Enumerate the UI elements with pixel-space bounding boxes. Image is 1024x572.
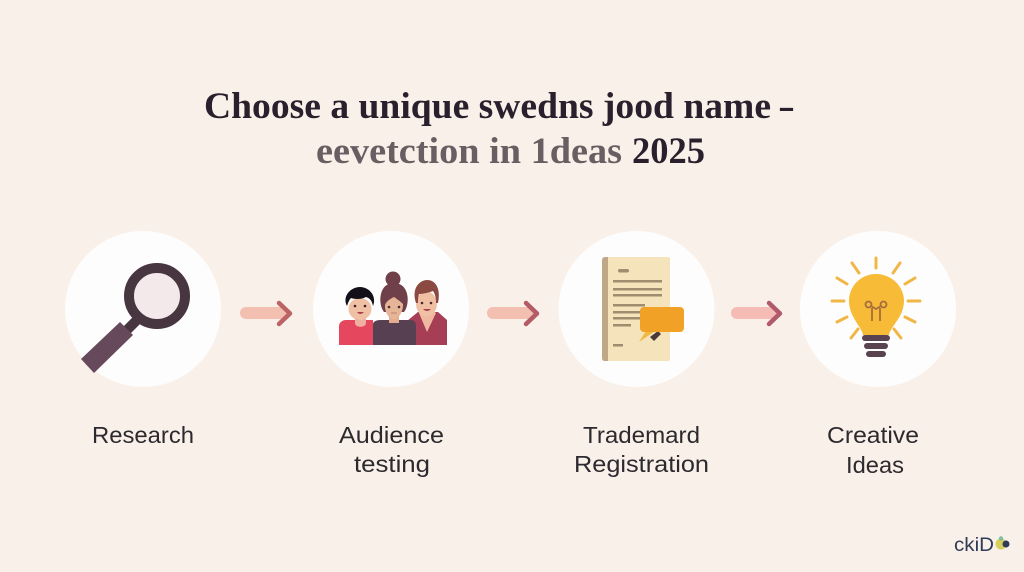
icon: light bulb [832,258,920,357]
arrow 2 [487,303,537,324]
step 1: research [65,231,221,387]
label: creative ideas: Ideas [846,452,904,478]
label: trademard registration: Registration [574,451,709,477]
label: creative ideas: Creative [827,422,919,448]
step 4: creative ideas [800,231,956,387]
label: audience testing: Audience [339,422,444,448]
label: research: Research [92,422,194,448]
label: audience testing: testing [354,451,430,477]
step 3: trademark registration [558,231,714,387]
title: Choose a unique swedns jood name [204,86,771,127]
title [204,86,795,172]
label: creative ideas [827,422,919,478]
icon: document with speech bubble [602,257,684,361]
label: trademard registration [574,422,709,477]
arrow 1 [240,303,290,324]
label: audience testing [339,422,444,477]
title: - [778,86,795,127]
label: trademard registration: Trademard [583,422,700,448]
logo: ckido [954,535,1010,556]
icon: magnifying glass [81,268,185,373]
logo: ckido: ckiD [954,535,994,556]
title: eevetction in 1deas [316,131,622,172]
step 2: audience testing [313,231,469,387]
arrow 3 [731,303,780,324]
title: 2025 [632,131,705,172]
icon: group of three people [339,272,447,345]
